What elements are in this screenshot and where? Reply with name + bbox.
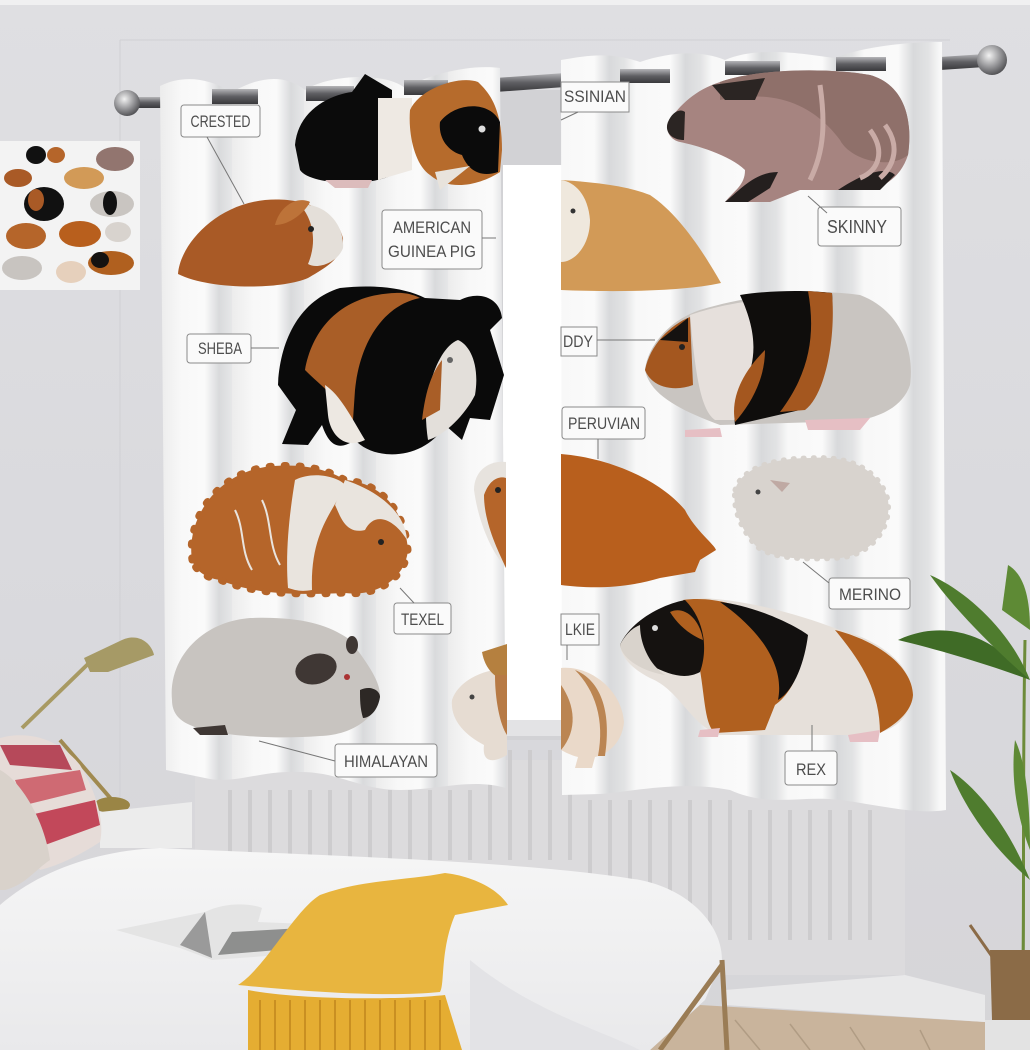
label: peruvian: PERUVIAN: [568, 414, 640, 433]
inset thumbnail: [0, 141, 140, 290]
grommets right: [620, 57, 886, 83]
label: sheba: [187, 334, 279, 363]
label: teddy: [561, 327, 655, 356]
guinea pig: peruvian: [561, 454, 716, 587]
wicker basket: [970, 925, 1030, 1050]
label: skinny: SKINNY: [827, 217, 887, 237]
ceiling moulding: [0, 0, 1030, 800]
radiator: [195, 750, 905, 975]
grommets left: [212, 80, 448, 104]
label: teddy: DDY: [563, 332, 593, 351]
guinea pig: silkie body (right curtain): [561, 668, 624, 768]
bed frame leg: [660, 960, 727, 1050]
guinea pig: american top-left: [295, 74, 502, 190]
label: merino: MERINO: [839, 585, 901, 604]
guinea pig: sheba: [278, 286, 504, 454]
patterned cushions: [0, 735, 101, 890]
guinea pig: crested: [178, 200, 343, 287]
open magazine: [116, 904, 332, 960]
label: abyssinian: [561, 82, 629, 120]
label: silkie: [561, 614, 599, 660]
potted palm plant: [898, 565, 1030, 1000]
label: himalayan: HIMALAYAN: [344, 752, 428, 771]
guinea pig: partial left edge: [474, 462, 506, 568]
label: american guinea pig: GUINEA PIG: [388, 242, 476, 261]
side table: [100, 802, 192, 848]
label: silkie: LKIE: [565, 620, 595, 639]
left curtain: [160, 67, 507, 790]
guinea pig: skinny: [667, 70, 909, 202]
guinea pig: teddy: [645, 291, 911, 437]
label: sheba: SHEBA: [198, 339, 242, 358]
label: rex: [785, 725, 837, 785]
yellow throw blanket: [238, 873, 508, 1050]
floor: [650, 975, 985, 1050]
label: himalayan: [259, 741, 437, 777]
label: crested: [181, 105, 260, 204]
label: american guinea pig: AMERICAN: [393, 218, 471, 237]
bed: [0, 848, 722, 1050]
right curtain: [561, 42, 946, 811]
guinea pig: merino: [734, 458, 888, 559]
label: merino: [803, 562, 910, 609]
guinea pig: himalayan: [172, 618, 380, 737]
guinea pig: american (right part): [561, 180, 721, 291]
label: abyssinian: SSINIAN: [564, 87, 626, 106]
label: texel: TEXEL: [401, 610, 444, 629]
label: american guinea pig: [382, 210, 496, 269]
guinea pig: texel: [191, 465, 408, 594]
guinea pig: rex: [620, 598, 913, 742]
label: rex: REX: [796, 760, 826, 779]
guinea pig: silkie head (left curtain): [452, 644, 507, 760]
label: texel: [394, 588, 451, 634]
desk lamp: [22, 638, 154, 813]
label: skinny: [808, 196, 901, 246]
curtain rod: [114, 45, 1007, 116]
label: crested: CRESTED: [190, 112, 250, 131]
window: [490, 90, 580, 740]
label: peruvian: [562, 407, 645, 459]
